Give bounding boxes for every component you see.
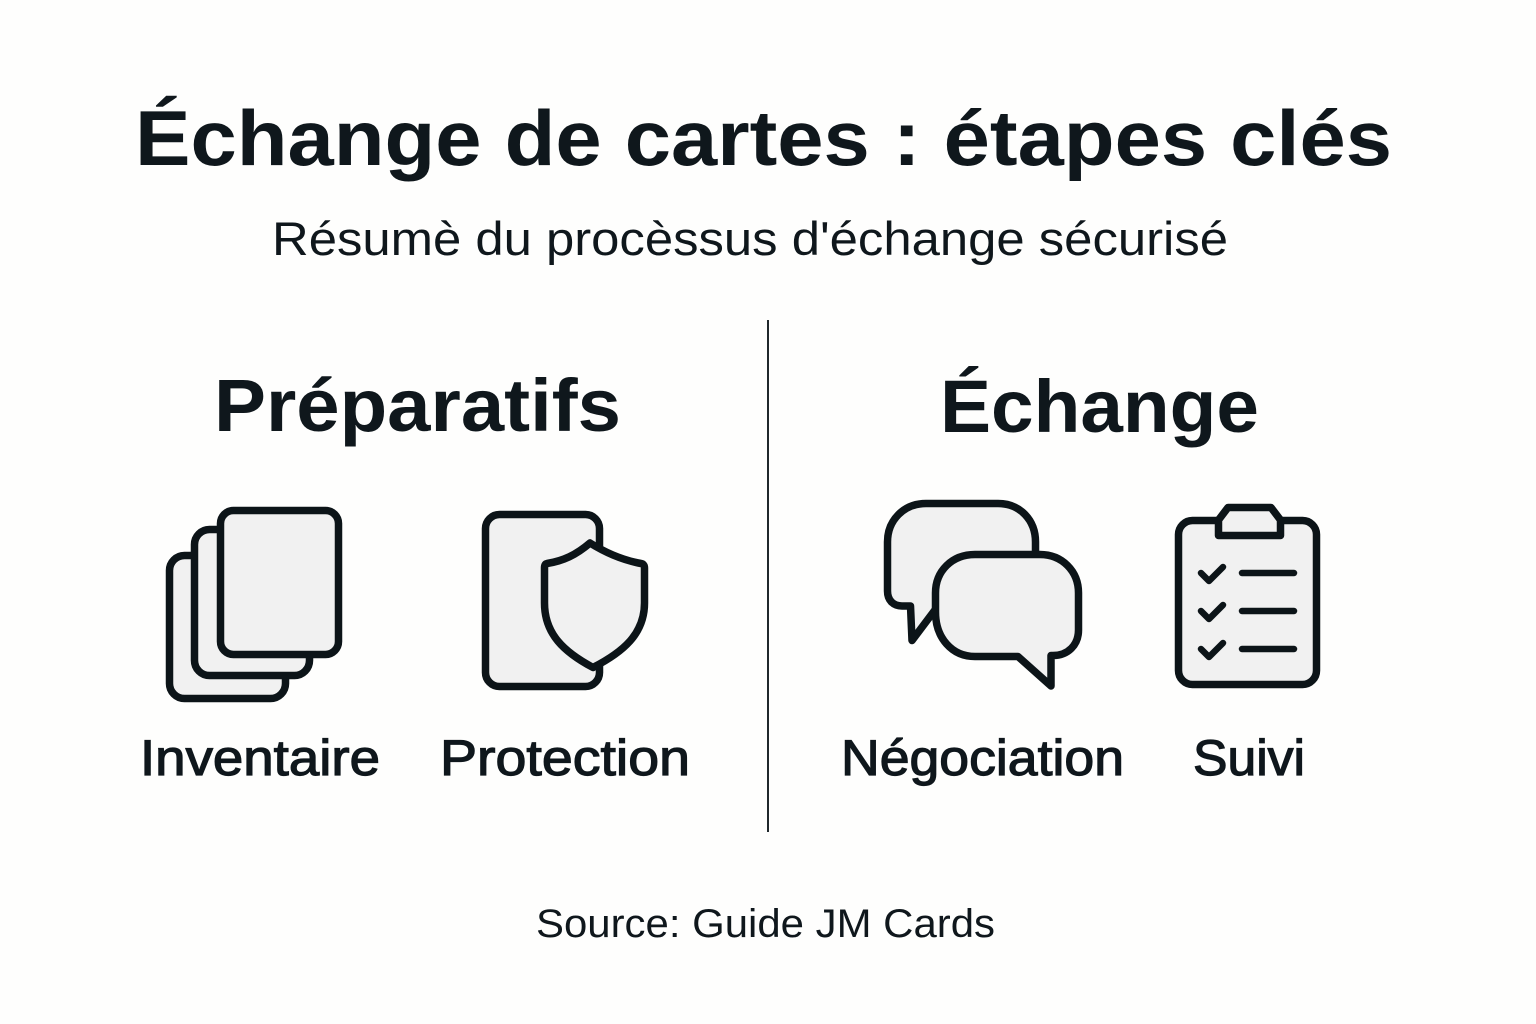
panel: Préparatifs: [140, 364, 690, 786]
label: Inventaire: Inventaire: [140, 730, 380, 786]
icon: clipboard checklist: [1178, 508, 1316, 684]
heading: Échange: Échange: [940, 365, 1259, 448]
icon: speech bubbles: [888, 504, 1078, 686]
label: Suivi: Suivi: [1193, 730, 1305, 786]
source note: Source: Guide JM Cards: [536, 902, 995, 946]
subtitle: Résumè du procèssus d'échange sécurisé: [272, 212, 1228, 265]
icon: card with shield: [486, 514, 644, 686]
title: Échange de cartes : étapes clés: [135, 94, 1392, 182]
heading: Préparatifs: Préparatifs: [214, 364, 621, 447]
icon: stacked cards: [170, 510, 338, 698]
label: Négociation: Négociation: [841, 730, 1124, 786]
panel: Échange: [841, 365, 1316, 786]
label: Protection: Protection: [440, 730, 690, 786]
